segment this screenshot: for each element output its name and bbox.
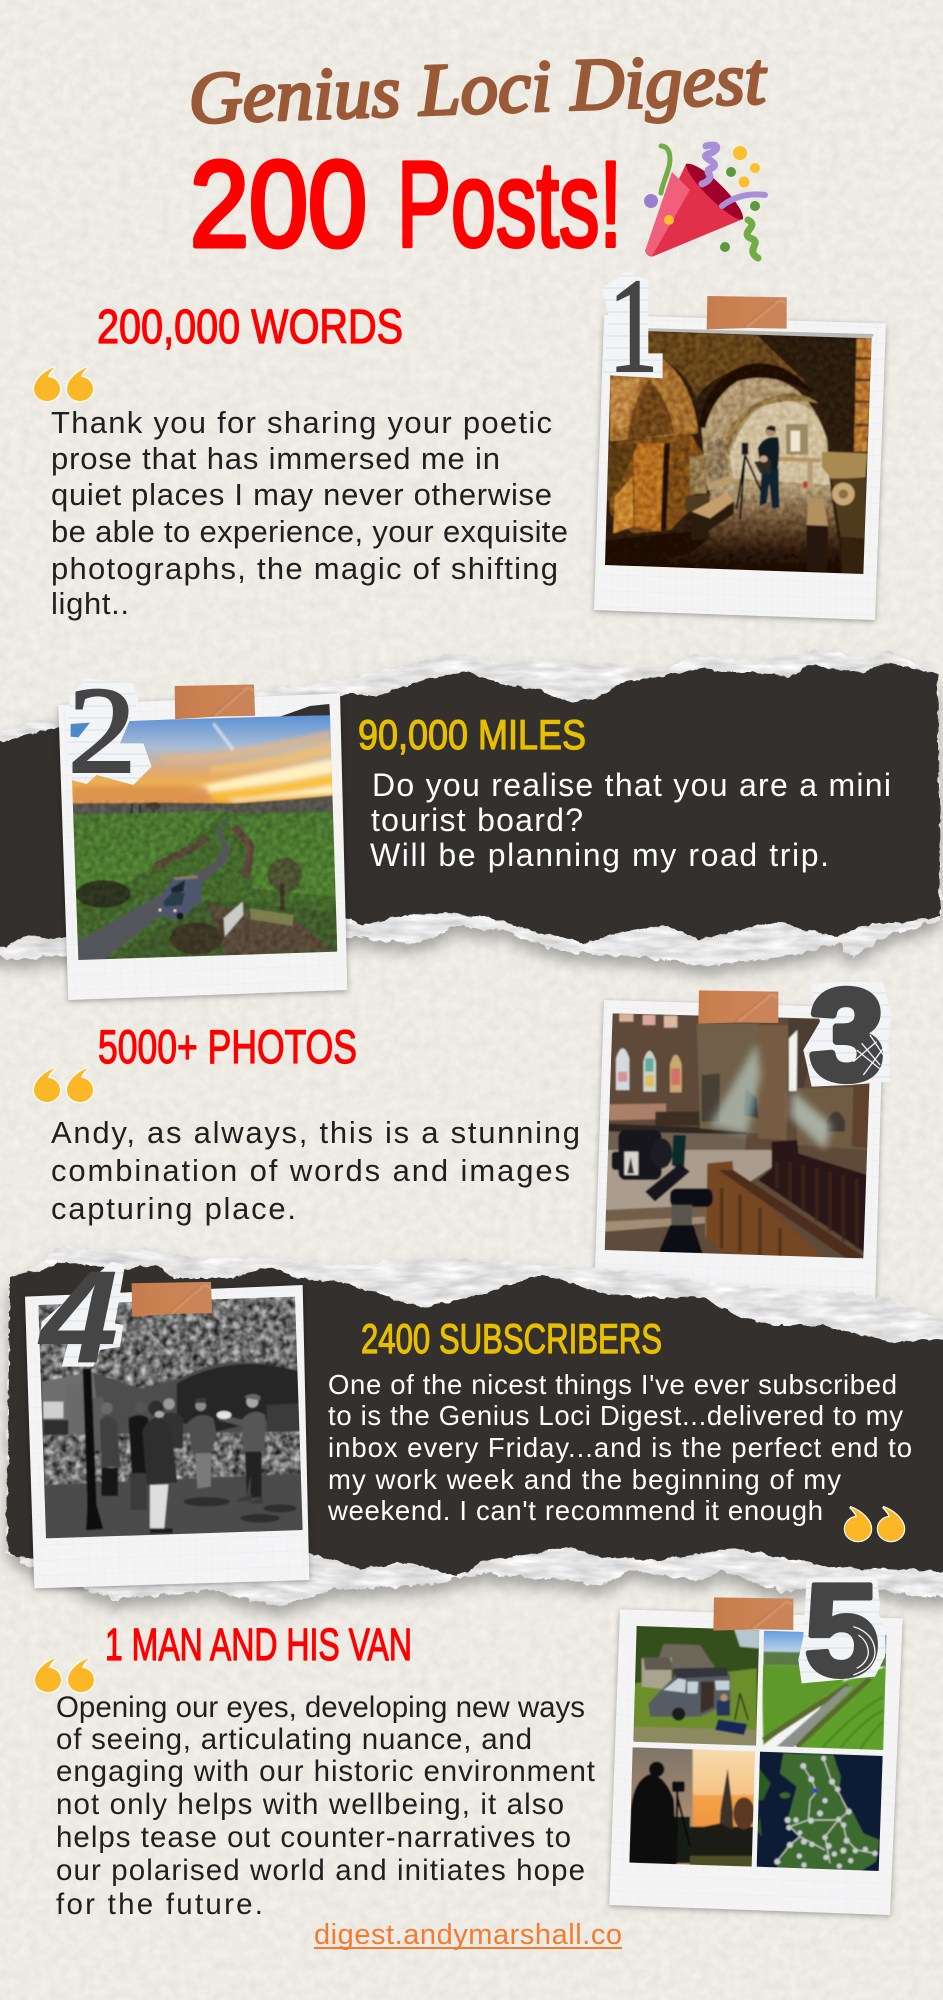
number 1 on paper scrap: 1 bbox=[608, 252, 658, 401]
torn white backing 2 bbox=[0, 650, 941, 965]
torn paper band 2 bbox=[0, 650, 941, 965]
text block: quote 1: be able to experience, your exquisite bbox=[51, 514, 568, 549]
polaroid 1: crypt photo bbox=[594, 252, 886, 620]
icon: party popper bbox=[644, 145, 765, 258]
text block: quote 2: Will be planning my road trip. bbox=[370, 837, 829, 873]
text block: quote 1: prose that has immersed me in bbox=[51, 441, 500, 476]
polaroid 4: group walking tour photo bbox=[25, 1243, 309, 1588]
text block: quote 4: my work week and the beginning of my bbox=[328, 1464, 841, 1495]
icon: opening quote 1 bbox=[34, 367, 93, 401]
text block: quote 2: tourist board? bbox=[371, 802, 583, 838]
text block: quote 2: Do you realise that you are a mini bbox=[372, 767, 891, 803]
icon: opening quote 3 bbox=[34, 1068, 93, 1102]
polaroid 5: van, road, silhouette and map collage bbox=[609, 1556, 903, 1915]
polaroid 3: cathedral photo bbox=[594, 964, 892, 1308]
icon: closing quote 4 bbox=[845, 1507, 904, 1541]
number 3 on paper scrap: 3 bbox=[810, 964, 884, 1107]
text block: quote 1 bbox=[51, 405, 568, 621]
tape 5 bbox=[713, 1597, 793, 1631]
heading: 200,000 words: 200,000 WORDS bbox=[97, 301, 403, 354]
heading: 200 Posts!: 200 bbox=[190, 136, 367, 272]
text block: quote 3: Andy, as always, this is a stunning bbox=[51, 1115, 580, 1150]
number 5 on paper scrap: 5 bbox=[804, 1556, 879, 1703]
photo: route map of Britain bbox=[755, 1750, 885, 1873]
text block: quote 1: Thank you for sharing your poetic bbox=[51, 405, 552, 440]
text block: quote 5: for the future. bbox=[56, 1888, 263, 1921]
torn paper band 4 bbox=[7, 1247, 943, 1607]
torn white backing 4 bbox=[7, 1247, 943, 1607]
text block: quote 3: combination of words and images bbox=[51, 1153, 570, 1188]
tape 1 bbox=[707, 296, 787, 329]
dark panel 2 bbox=[0, 662, 940, 952]
text block: quote 4: One of the nicest things I've ever subscribed bbox=[328, 1369, 897, 1400]
polaroid 2: sunset road and van photo bbox=[58, 662, 347, 1000]
text block: quote 1: photographs, the magic of shifting bbox=[51, 551, 558, 586]
text block: quote 5: engaging with our historic environment bbox=[56, 1755, 595, 1788]
text block: quote 5: our polarised world and initiates hope bbox=[56, 1854, 585, 1887]
text block: quote 3 bbox=[51, 1115, 580, 1226]
photo: aerial field and lane bbox=[760, 1630, 888, 1752]
text block: quote 5: Opening our eyes, developing new ways bbox=[56, 1691, 585, 1724]
heading: 200 Posts! bbox=[190, 136, 622, 272]
heading: 200 Posts!: Posts! bbox=[397, 136, 622, 272]
number 2 on paper scrap: 2 bbox=[68, 662, 136, 799]
text block: quote 5 bbox=[56, 1691, 595, 1921]
text block: quote 4 bbox=[327, 1369, 912, 1526]
text block: quote 5: of seeing, articulating nuance, and bbox=[56, 1723, 532, 1756]
title: Genius Loci Digest: Genius Loci Digest bbox=[187, 38, 769, 140]
text block: quote 5: helps tease out counter-narratives to bbox=[56, 1821, 571, 1854]
tape 3 bbox=[698, 990, 778, 1024]
tape 2 bbox=[174, 683, 255, 719]
icon: opening quote 5 bbox=[35, 1658, 94, 1692]
text block: quote 4: weekend. I can't recommend it enough bbox=[327, 1495, 823, 1526]
text block: quote 4: inbox every Friday...and is the perfect end to bbox=[328, 1432, 912, 1463]
dark panel 4 bbox=[7, 1262, 943, 1576]
text block: quote 1: light.. bbox=[51, 586, 129, 621]
text block: quote 3: capturing place. bbox=[51, 1191, 296, 1226]
tape 4 bbox=[131, 1281, 212, 1317]
heading: 5000+ photos: 5000+ PHOTOS bbox=[98, 1020, 357, 1073]
number 4 on paper scrap: 4 bbox=[37, 1243, 118, 1390]
photo: silhouette and spire at dusk bbox=[628, 1746, 756, 1868]
link: digest.andymarshall.co: digest.andymarshall.co bbox=[314, 1919, 622, 1951]
text block: quote 4: to is the Genius Loci Digest...delivered to my bbox=[328, 1400, 903, 1431]
heading: 1 man and his van: 1 MAN AND HIS VAN bbox=[105, 1619, 412, 1670]
text block: quote 1: quiet places I may never otherwise bbox=[51, 477, 552, 512]
text block: quote 5: not only helps with wellbeing, it also bbox=[56, 1788, 564, 1821]
text block: quote 2 bbox=[370, 767, 891, 873]
heading: 2400 subscribers: 2400 SUBSCRIBERS bbox=[361, 1315, 662, 1362]
heading: 90,000 miles: 90,000 MILES bbox=[358, 711, 586, 758]
photo: van at chapel bbox=[632, 1623, 762, 1747]
